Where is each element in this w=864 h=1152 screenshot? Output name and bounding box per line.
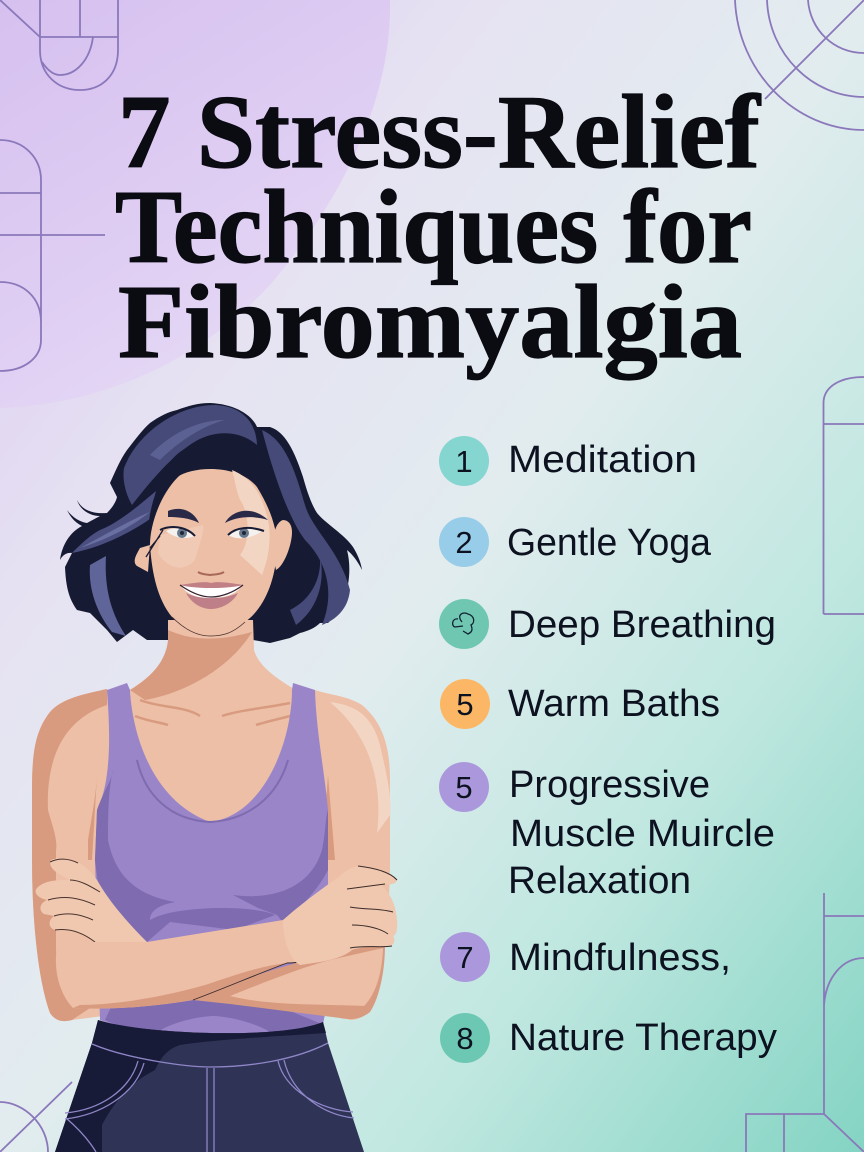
list item 5: 5 — [455, 770, 473, 805]
purple tank top — [95, 683, 328, 1036]
arms and shoulders — [32, 689, 391, 1021]
list item 8: Nature Therapy — [509, 1017, 777, 1059]
list item 2: 2 — [455, 525, 473, 560]
decoration: bottom-left line art — [0, 1082, 72, 1152]
collarbones — [135, 700, 290, 725]
list item 2: Gentle Yoga — [507, 522, 712, 564]
left hand — [36, 859, 147, 942]
list item 3: Deep Breathing — [508, 604, 776, 646]
list item 2 — [439, 517, 712, 567]
list item 1 — [439, 436, 697, 486]
title — [115, 73, 761, 380]
list item 3 — [439, 599, 776, 649]
eyebrows — [168, 509, 268, 523]
hair — [60, 403, 362, 643]
title: Fibromyalgia — [118, 263, 742, 380]
list item 7 — [440, 932, 731, 982]
decoration: right line art — [824, 377, 864, 614]
list item 1: 1 — [455, 444, 473, 479]
list item 7: 7 — [456, 940, 474, 975]
list item 4: 5 — [456, 687, 474, 722]
pants — [55, 1020, 364, 1152]
back forearm highlight — [230, 948, 383, 1006]
list item 7: Mindfulness, — [509, 937, 731, 979]
neck shadow — [130, 630, 252, 700]
nose — [198, 572, 224, 575]
list item 5: Muscle Muircle — [510, 813, 775, 855]
decoration: top-left line art — [0, 0, 118, 90]
eyes — [146, 527, 264, 557]
mouth — [180, 582, 243, 609]
background blob — [0, 0, 390, 408]
decoration: bottom-right line art — [746, 893, 864, 1152]
title: 7 Stress-Relief — [118, 73, 761, 190]
icon: breath swirl — [453, 613, 474, 634]
right hand — [283, 866, 397, 965]
hair strands over forehead — [148, 446, 240, 545]
list item 8 — [440, 1013, 777, 1063]
neck — [130, 620, 300, 760]
illustration: woman with crossed arms — [32, 403, 397, 1152]
list item 5: Relaxation — [508, 860, 691, 902]
back forearm — [193, 945, 385, 1019]
list item 5 — [439, 762, 775, 902]
decoration: top-right arcs — [735, 0, 864, 130]
list item 4: Warm Baths — [508, 683, 720, 725]
face — [135, 446, 292, 636]
list item 1: Meditation — [508, 439, 697, 481]
list item 5: Progressive — [509, 764, 710, 806]
title: Techniques for — [115, 168, 752, 285]
list item 8: 8 — [456, 1021, 474, 1056]
decoration: left line art — [0, 140, 105, 371]
front forearm — [56, 909, 350, 1009]
list item 4 — [440, 679, 720, 729]
